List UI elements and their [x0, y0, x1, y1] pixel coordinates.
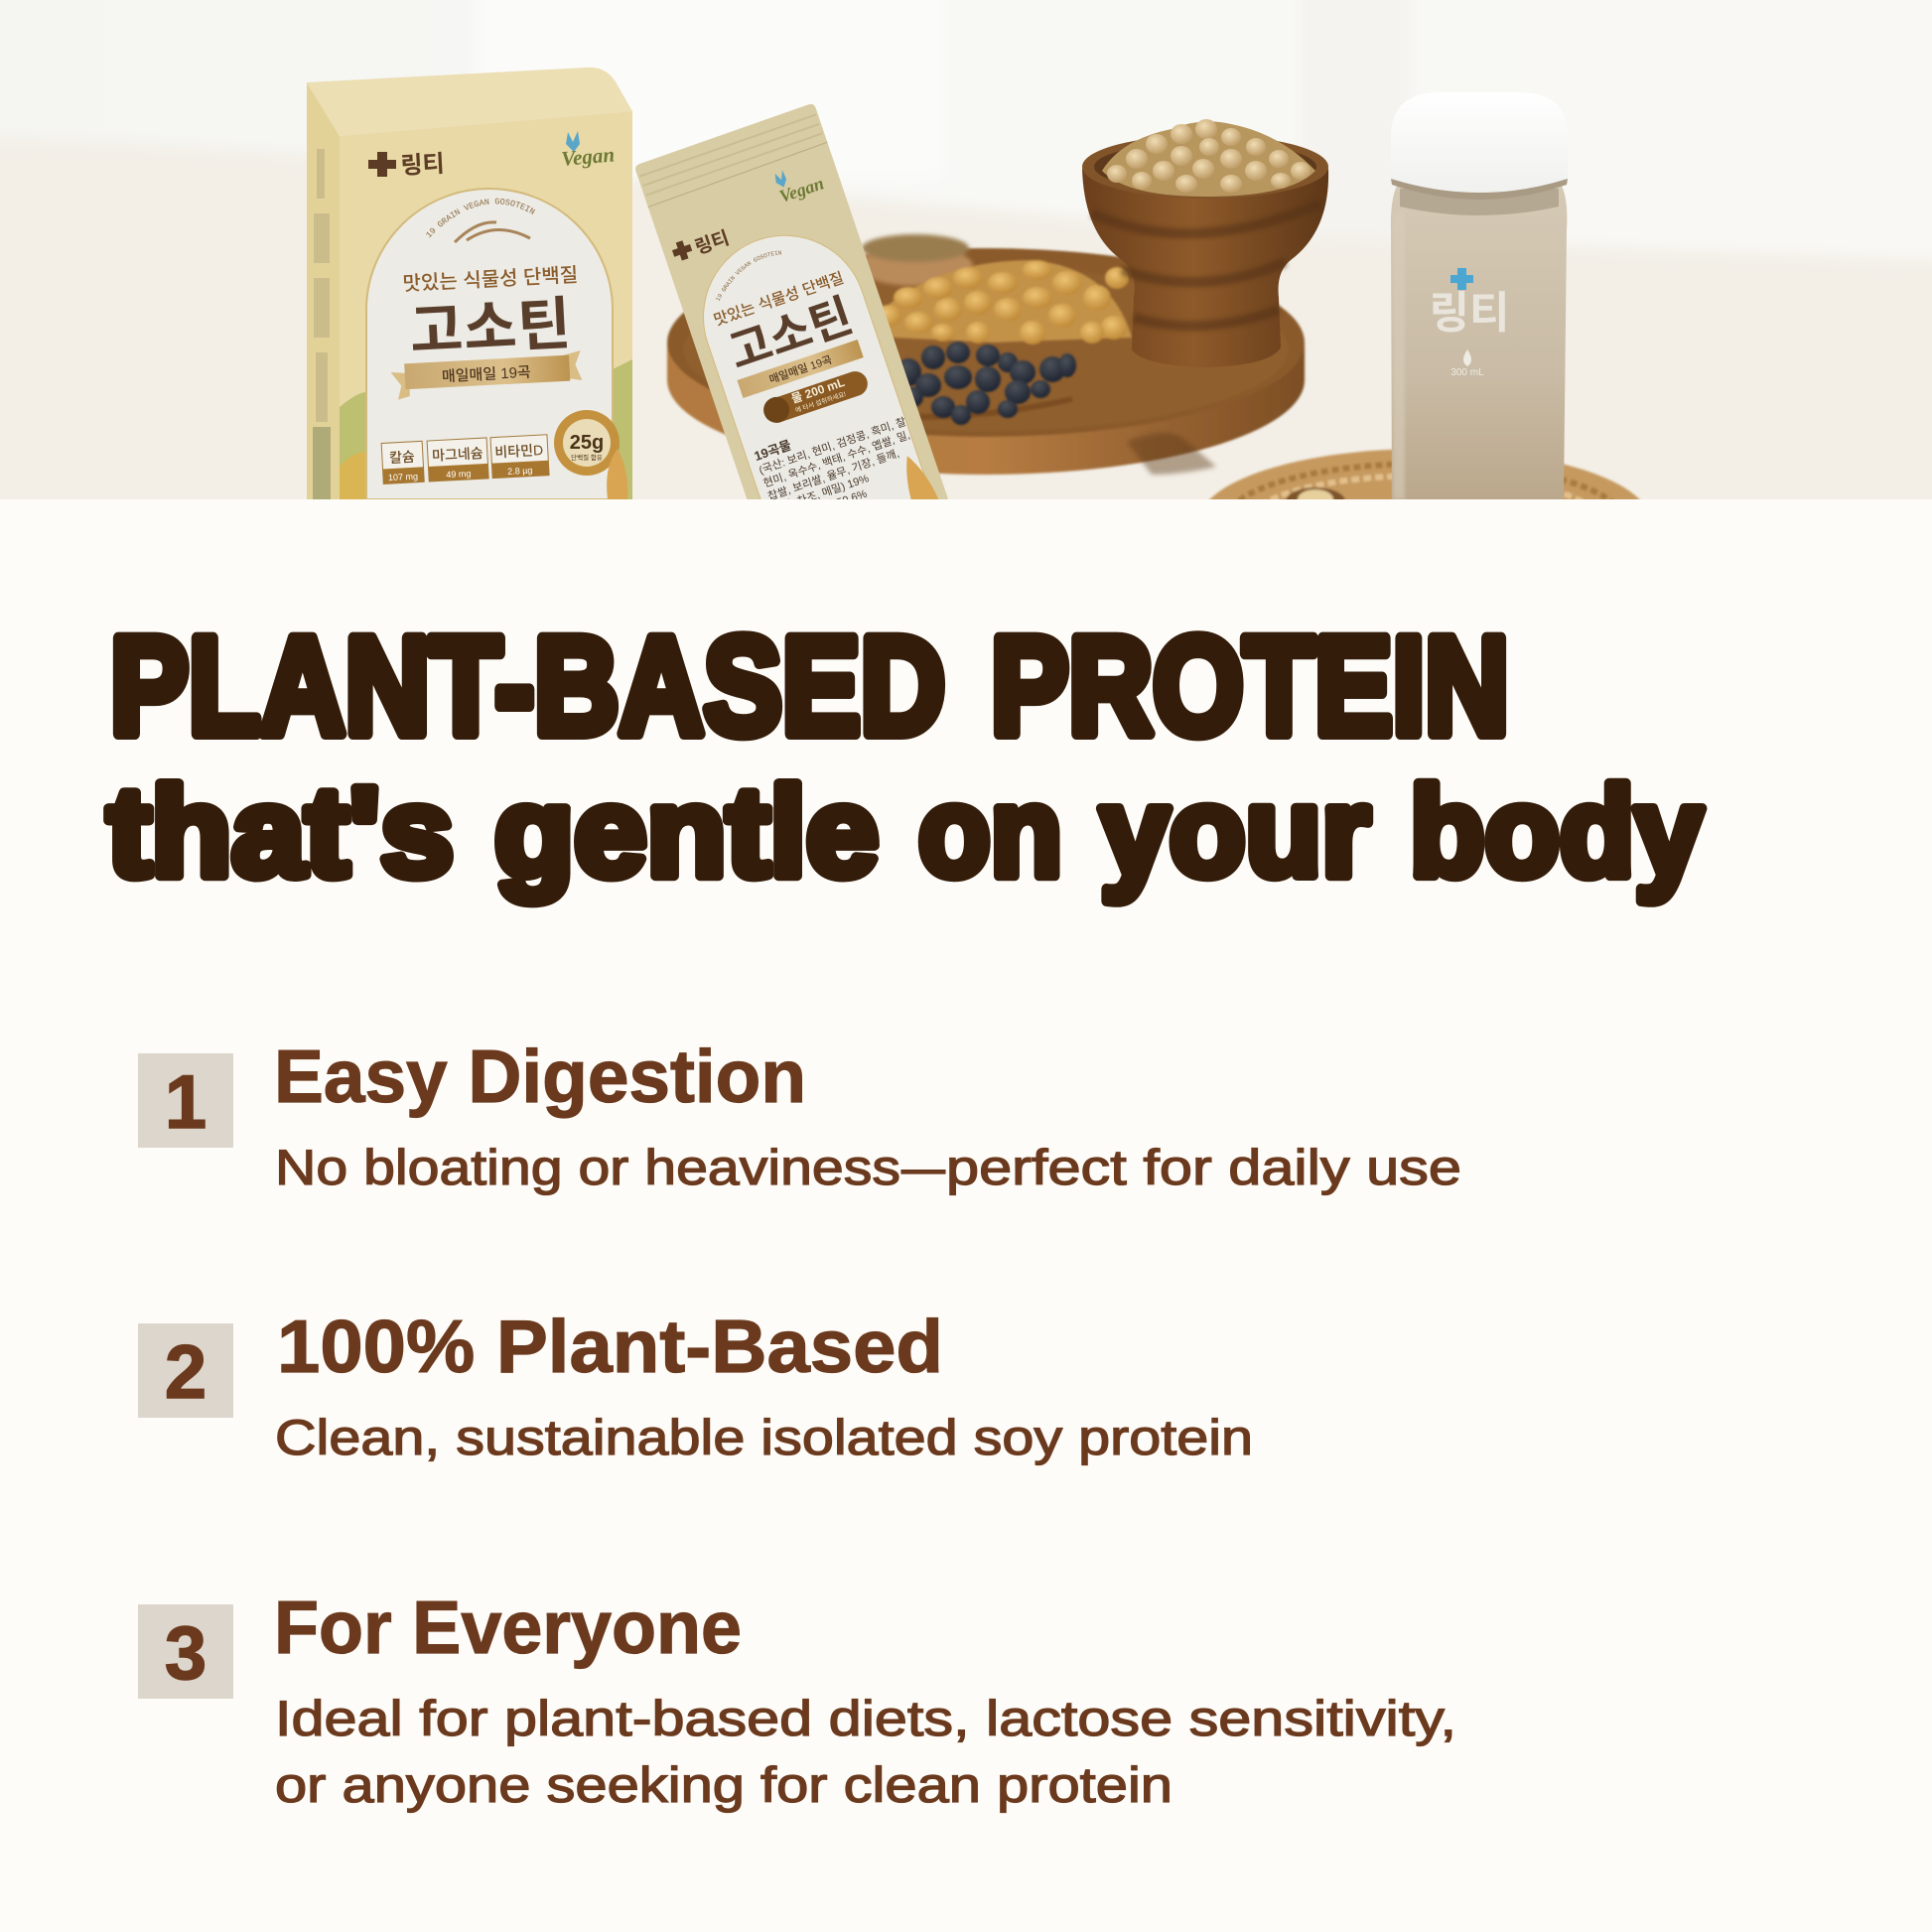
rattan mat [1199, 449, 1650, 594]
photo background: wall and table [0, 0, 1932, 526]
benefit 2 title: 100% Plant-Based [277, 1305, 943, 1388]
ingredients text [753, 400, 925, 529]
benefit 1 title: Easy Digestion [274, 1035, 806, 1118]
small wooden spoon of seeds [858, 234, 973, 286]
benefit 3 description: Ideal for plant-based diets, lactose sensitivity, [275, 1691, 1456, 1746]
arch subtitle: 19 GRAIN VEGAN GOSOTEIN [426, 199, 535, 238]
box logo: 링티 [400, 151, 445, 180]
water volume badge [760, 367, 871, 426]
nutrition tags: 칼슘 [389, 449, 415, 466]
landscape at box bottom [340, 359, 632, 499]
benefit 2 description: Clean, sustainable isolated soy protein [275, 1410, 1253, 1465]
bottle logo: 링티 [1430, 289, 1509, 338]
number badge 1: 1 [165, 1060, 207, 1145]
hero product photo [0, 0, 1932, 499]
nutrition tags: 비타민D [494, 442, 544, 460]
pouch arch subtitle: 19 GRAIN VEGAN GOSOTEIN [716, 250, 781, 302]
heading line 2 [107, 761, 1703, 903]
box product name: 고소틴 [408, 292, 573, 364]
product box [307, 68, 632, 499]
benefit 3 description: or anyone seeking for clean protein [275, 1757, 1173, 1813]
number badge 2: 2 [165, 1330, 207, 1415]
ingredients text: (국산: 보리, 현미, 검정콩, 흑미, 찰 [757, 414, 907, 477]
heading line 2: body [1410, 761, 1703, 903]
heading line 1: PROTEIN [991, 608, 1509, 763]
heading line 2: that's [107, 761, 454, 903]
label arch [366, 189, 613, 499]
number badge 3 [138, 1604, 233, 1699]
pouch tagline: 맛있는 식물성 단백질 [712, 269, 846, 330]
ribbon [390, 350, 583, 400]
pouch label arch [682, 213, 940, 574]
benefit 1 description [275, 1140, 1461, 1195]
pouch logo: 링티 [692, 227, 732, 259]
pouch ribbon [737, 340, 864, 398]
drink pouch [635, 103, 948, 499]
benefit 3 description [275, 1691, 1456, 1813]
25g seal [554, 410, 620, 476]
water volume badge: 에 타서 섭취하세요! [794, 389, 847, 415]
bottle logo [1430, 268, 1509, 378]
milk bottle [1391, 92, 1568, 499]
heading line 2: your [1100, 761, 1370, 903]
pouch vegan mark: Vegan [776, 173, 826, 207]
ingredients text: 현미, 옥수수, 백태, 수수, 옙쌀, 밀, [761, 429, 911, 490]
25g seal: 단백질 함유 [571, 453, 603, 462]
nutrition tags: 마그네슘 [432, 445, 483, 464]
ingredients text: 19곡물 [753, 438, 793, 464]
wooden tray [667, 248, 1305, 475]
pouch product name: 고소틴 [723, 289, 859, 378]
nutrition tags: 49 mg [446, 469, 472, 480]
benefit 1 description: — [901, 1140, 945, 1195]
nutrition tags: 107 mg [388, 472, 418, 483]
benefit 1 description: perfect for daily use [946, 1140, 1461, 1195]
heading line 2: gentle [494, 761, 879, 903]
side panel printed details [313, 149, 331, 499]
pouch wheat ear [897, 451, 946, 528]
wheat ear [607, 449, 627, 499]
number badge 2 [138, 1323, 233, 1418]
wheat sketch [455, 222, 530, 242]
black bean pile [896, 342, 1076, 425]
benefit 1 description: No bloating or heaviness [275, 1140, 900, 1195]
water volume badge: 물 200 mL [789, 375, 847, 406]
nutrition tags: 2.8 µg [507, 466, 533, 477]
number badge 3: 3 [165, 1611, 207, 1696]
bottle logo: 300 mL [1450, 367, 1484, 378]
box tagline: 맛있는 식물성 단백질 [402, 263, 579, 296]
pouch ribbon: 매일매일 19곡 [767, 352, 834, 386]
heading line 2: on [918, 761, 1062, 903]
ribbon: 매일매일 19곡 [442, 364, 531, 385]
25g seal: 25g [570, 432, 604, 454]
number badge 1 [138, 1053, 233, 1148]
nutrition tags [381, 435, 549, 483]
box logo [368, 151, 445, 180]
soybeans in the bowl [1102, 119, 1315, 197]
pouch vegan mark [772, 159, 826, 207]
pouch artwork [672, 170, 939, 499]
wooden pedestal bowl of beans [1082, 119, 1328, 367]
pouch logo [670, 226, 732, 266]
heading line 1: PLANT-BASED [110, 608, 945, 763]
yellow soybean pile [874, 260, 1132, 345]
benefit 3 title: For Everyone [274, 1586, 742, 1669]
vegan mark: Vegan [560, 142, 616, 171]
